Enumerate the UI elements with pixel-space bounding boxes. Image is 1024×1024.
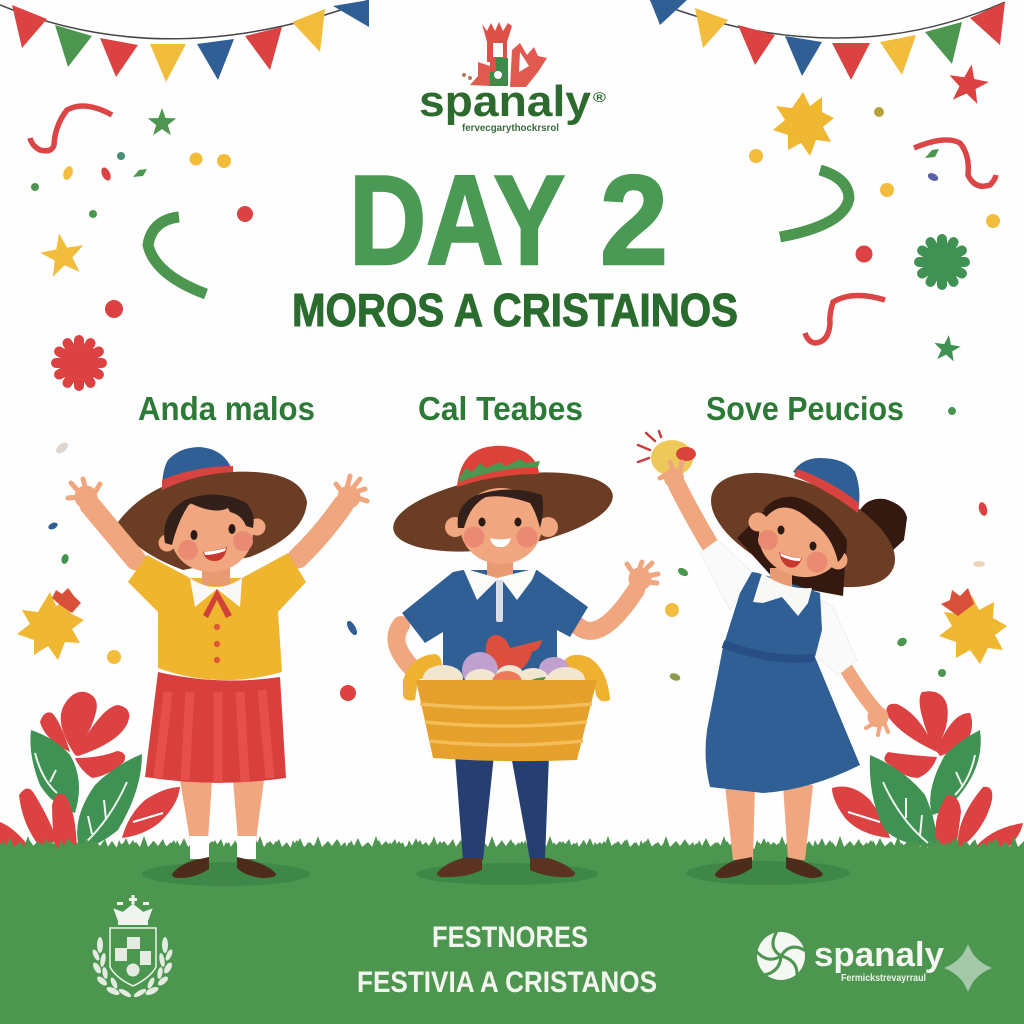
held food [638,431,696,488]
logo wordmark: spanaly [419,77,592,126]
logo: spanaly top [419,22,607,134]
hat brim [695,449,911,611]
blouse [128,553,306,680]
hands [68,476,367,508]
icon: swirl [757,932,805,980]
hat brim [118,472,307,570]
label: centre child: Cal Teabes [418,390,583,427]
confetti: mid sides [47,440,989,701]
hair bun [860,499,907,553]
collar and bow [190,578,242,663]
legs and shoes [715,785,823,878]
footer heading: FESTNORES [432,921,588,954]
raised arm [677,485,710,545]
lowered arm [847,670,877,712]
confetti: upper left [30,106,253,318]
child: left girl [68,447,367,878]
hair [737,497,847,596]
confetti: upper right [749,61,1000,415]
tagline: Fermickstrevayrraul [841,973,926,984]
hat leaves [459,459,540,482]
skirt [145,672,286,783]
legs and shoes [172,780,276,878]
registered mark: ® [593,89,607,105]
dress [706,572,860,793]
plants: bottom left [0,692,180,850]
collar [753,573,812,616]
flower: red left [56,340,102,386]
pants and shoes [437,755,575,877]
head [748,493,852,589]
lowered hand [866,707,888,735]
hat band [162,466,233,490]
icon: red crown tower logo [462,22,547,87]
ground: grass [0,832,1024,1024]
basket [416,680,597,761]
hat brim [388,459,618,565]
laurel right [133,937,174,999]
bunting: top left [0,0,369,82]
hat crown [793,458,859,511]
logo: spanaly footer [757,932,992,992]
neck [202,560,230,586]
hat band [794,469,859,513]
subtitle: MOROS A CRISTAINOS [292,284,738,336]
arms [90,505,136,560]
wordmark: spanaly [814,936,944,974]
child: centre boy [388,446,658,877]
burst: yellow right [939,588,1007,664]
shield [110,928,156,986]
label: right child: Sove Peucios [706,390,904,427]
title: DAY 2: DAY [349,149,565,291]
plants: bottom right [832,691,1023,850]
food in basket [403,635,610,701]
logo tagline: fervecgarythockrsrol [462,123,559,134]
neck [487,555,513,579]
hat crown [162,447,233,490]
ground shadows [142,861,850,886]
bunting: top right [650,0,1005,80]
burst: yellow left [17,588,84,660]
label: left child: Anda malos [138,390,315,427]
icon: four-point star [944,944,992,992]
waving hand [627,562,658,590]
child: right girl [638,431,911,878]
emblem: crest with crown and laurel [91,895,174,999]
flower: green right [919,239,965,285]
footer subheading: FESTIVIA A CRISTANOS [357,966,657,999]
shield charges [115,937,151,976]
neck [770,568,792,594]
title: DAY 2: 2 [600,149,668,291]
laurel left [91,937,132,999]
white sleeves [700,540,753,610]
shirt [402,570,588,680]
collar [463,568,537,622]
head [158,493,266,577]
head [445,488,558,564]
arms [396,625,412,668]
crown [115,895,151,925]
hat crown [457,446,539,487]
